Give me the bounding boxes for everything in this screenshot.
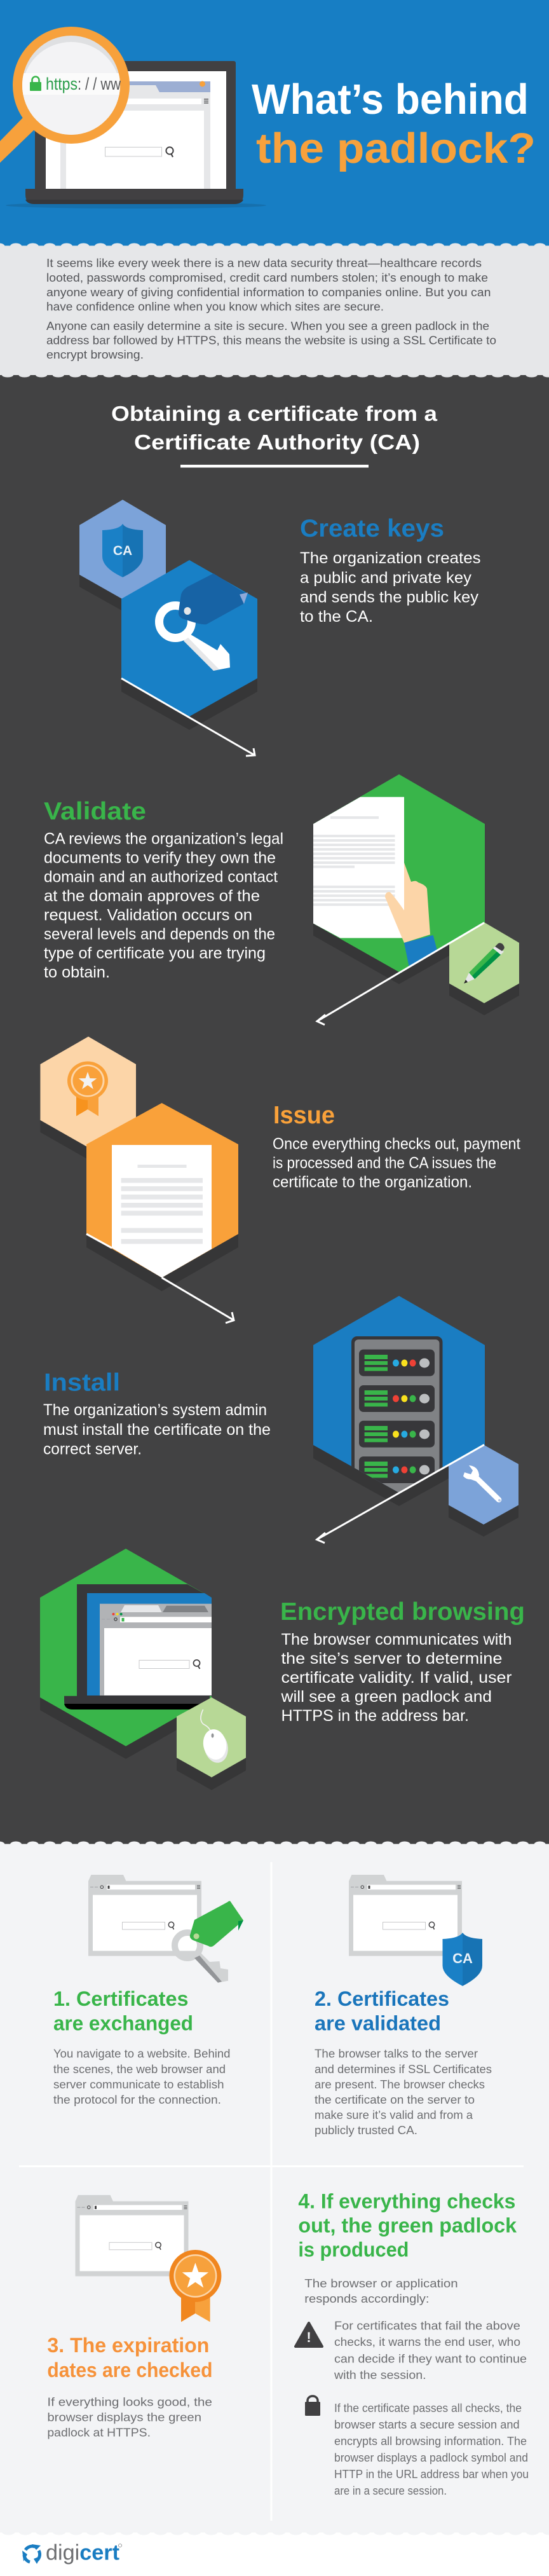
icon: mouse [201, 1709, 231, 1765]
card 4: green padlock is produced [295, 2189, 529, 2497]
icon: laptop with secure browser [64, 1584, 212, 1709]
title: What’s behind [252, 76, 529, 123]
text block: introduction: have confidence online when you know which sites are secure. [46, 300, 384, 313]
text block: If everything looks good, the [47, 2395, 212, 2408]
text block: passed checks: HTTP in the URL address bar when you [334, 2467, 529, 2481]
text block: failed checks [334, 2319, 527, 2381]
step: install text: Install [44, 1369, 120, 1396]
text block: The browser talks to the server [315, 2047, 478, 2060]
step: validate text: documents to verify they own the [44, 849, 276, 867]
text block: failed checks: can decide if they want to continue [334, 2352, 527, 2365]
step: issue illustration [40, 1036, 238, 1323]
step: validate text: request. Validation occurs on [44, 907, 252, 924]
step: issue text: is processed and the CA issues the [273, 1154, 496, 1172]
icon: magnifying glass with https address: https [46, 74, 78, 93]
text block: passed checks: encrypts all browsing information. The [334, 2434, 527, 2448]
step: encrypted browsing text: the site’s server to determine [281, 1650, 502, 1668]
icon: server rack [351, 1336, 442, 1502]
text block [47, 2395, 212, 2439]
icon: browser with green key tag [88, 1875, 243, 1983]
step: encrypted browsing text [280, 1598, 525, 1725]
heading: obtaining a certificate [111, 402, 438, 468]
arrow to encrypted browsing [317, 1445, 484, 1543]
text block: passed checks: are in a secure session. [334, 2484, 447, 2497]
text block [315, 2047, 492, 2137]
text block: publicly trusted CA. [315, 2123, 417, 2137]
title: the padlock? [256, 125, 536, 172]
logo: digicert: digicert [46, 2540, 119, 2565]
heading: 2. Certificates [315, 1987, 449, 2010]
step: create keys text [300, 515, 480, 626]
icon: warning triangle [295, 2323, 322, 2346]
step: issue text [273, 1102, 520, 1191]
icon: magnifying glass with https address: : / / ww [78, 74, 121, 93]
text block: passed checks: browser displays a padlock symbol and [334, 2451, 528, 2464]
icon: award badge [67, 1062, 108, 1116]
text block: introduction [46, 256, 496, 361]
heading: 4. If everything checks [298, 2189, 515, 2212]
text block: introduction: Anyone can easily determine a site is secure. When you see a green padlock in the [46, 319, 489, 332]
text block: passed checks: If the certificate passes all checks, the [334, 2401, 522, 2415]
icon: CA shield: CA [113, 544, 132, 558]
text block: introduction: encrypt browsing. [46, 348, 144, 361]
step: validate text: domain and an authorized contact [44, 868, 278, 886]
card 1: certificates are exchanged [53, 1875, 243, 2106]
step: encrypted browsing text: Encrypted browsing [280, 1598, 525, 1626]
step: install illustration [313, 1296, 518, 1543]
title [252, 76, 536, 172]
text block: introduction: address bar followed by HTTPS, this means the website is using a SSL Certificate to [46, 333, 496, 347]
heading: out, the green padlock [298, 2214, 517, 2237]
heading [315, 1987, 449, 2034]
step: validate text: type of certificate you are trying [44, 945, 266, 963]
heading: are exchanged [53, 2011, 193, 2034]
step: validate text: at the domain approves of the [44, 887, 260, 905]
icon: browser with CA shield: CA [452, 1950, 473, 1966]
icon: document held by hand [313, 797, 437, 969]
text block: intro: responds accordingly: [304, 2292, 430, 2305]
text block: are present. The browser checks [315, 2078, 485, 2091]
step: validate text: to obtain. [44, 964, 110, 982]
step: validate text [44, 798, 283, 982]
icon: padlock [305, 2396, 320, 2416]
step: encrypted browsing illustration [40, 1549, 246, 1790]
text block: You navigate to a website. Behind [53, 2047, 231, 2060]
icon: warning triangle: ! [306, 2329, 311, 2345]
text block: passed checks: browser starts a secure session and [334, 2418, 520, 2431]
step: install text [43, 1369, 271, 1458]
heading: are validated [315, 2011, 441, 2034]
icon: pencil [464, 943, 505, 983]
panel: obtaining a certificate [0, 374, 549, 1844]
text block: the certificate on the server to [315, 2093, 475, 2106]
text block: failed checks: with the session. [334, 2368, 426, 2381]
heading: obtaining a certificate: Certificate Authority (CA) [134, 430, 420, 454]
icon: CA shield [102, 524, 143, 577]
step: create keys text: to the CA. [300, 608, 373, 626]
arrow to install [86, 1234, 234, 1323]
icon: magnifying glass with https address [0, 27, 130, 163]
arrow to issue [317, 922, 484, 1025]
text block: make sure it’s valid and from a [315, 2108, 473, 2121]
text block: browser displays the green [47, 2411, 201, 2423]
text block: failed checks: checks, it warns the end user, who [334, 2335, 520, 2348]
text block: introduction: looted, passwords compromised, credit card numbers stolen; it’s enough to make [46, 271, 488, 284]
heading [53, 1987, 193, 2034]
text block [53, 2047, 231, 2106]
icon: key with tag [159, 573, 248, 671]
step: issue text: Once everything checks out, payment [273, 1135, 520, 1153]
text block: intro: The browser or application [304, 2277, 458, 2290]
text block: the scenes, the web browser and [53, 2062, 226, 2076]
text block: passed checks [334, 2401, 529, 2497]
heading: 3. The expiration [47, 2334, 209, 2357]
text block: server communicate to establish [53, 2078, 224, 2091]
heading [298, 2189, 517, 2261]
icon: browser with medal [75, 2195, 221, 2322]
step: create keys text: Create keys [300, 515, 444, 542]
text block: the protocol for the connection. [53, 2093, 221, 2106]
card 3: expiration dates are checked [47, 2195, 221, 2439]
text block: padlock at HTTPS. [47, 2426, 151, 2439]
arrow to validate [121, 678, 255, 756]
text block: intro [304, 2277, 458, 2305]
step: create keys illustration [79, 500, 257, 756]
text block: failed checks: For certificates that fail the above [334, 2319, 520, 2332]
heading: 1. Certificates [53, 1987, 188, 2010]
step: create keys text: The organization creates [300, 549, 480, 567]
text block: introduction: It seems like every week there is a new data security threat—healthcare records [46, 256, 482, 270]
heading: is produced [298, 2238, 409, 2261]
step: issue text: Issue [273, 1102, 335, 1129]
step: create keys text: and sends the public key [300, 589, 479, 606]
step: validate text: several levels and depends on the [44, 926, 275, 943]
icon: certificate document [112, 1145, 212, 1278]
step: validate text: Validate [44, 798, 146, 825]
icon: wrench [463, 1465, 501, 1502]
text block: introduction: anyone weary of giving confidential information to companies online. But you can [46, 285, 491, 299]
panel: how the browser checks a certificate [0, 1840, 549, 2533]
step: install text: The organization’s system admin [43, 1401, 267, 1419]
heading: obtaining a certificate: Obtaining a certificate from a [111, 402, 438, 425]
step: validate illustration [313, 774, 519, 1025]
icon: browser with CA shield [349, 1875, 482, 1986]
card 2: certificates are validated [315, 1875, 492, 2137]
step: encrypted browsing text: certificate validity. If valid, user [281, 1669, 512, 1687]
step: issue text: certificate to the organization. [273, 1174, 472, 1191]
heading [47, 2334, 212, 2381]
step: install text: must install the certificate on the [43, 1421, 271, 1439]
step: validate text: CA reviews the organization’s legal [44, 830, 283, 848]
step: encrypted browsing text: HTTPS in the address bar. [281, 1707, 469, 1725]
icon: laptop with browser [6, 61, 266, 209]
step: encrypted browsing text: The browser communicates with [281, 1631, 512, 1648]
step: encrypted browsing text: will see a green padlock and [280, 1688, 492, 1706]
heading: dates are checked [47, 2359, 212, 2381]
step: install text: correct server. [43, 1441, 142, 1458]
step: create keys text: a public and private key [300, 569, 472, 587]
panel: header [0, 0, 549, 247]
text block: and determines if SSL Certificates [315, 2062, 492, 2076]
